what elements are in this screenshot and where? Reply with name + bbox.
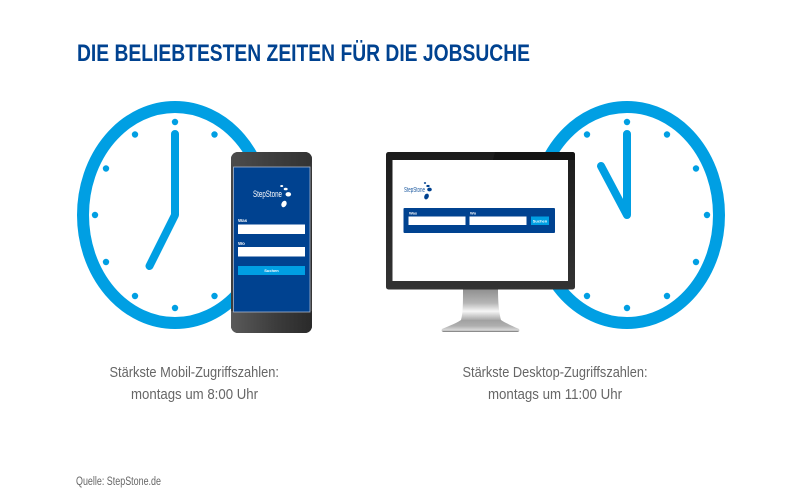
search button	[531, 216, 549, 225]
caption: mobile: montags um 8:00 Uhr	[131, 386, 258, 403]
field: Was: Was	[409, 210, 418, 216]
smartphone	[231, 152, 312, 333]
caption: desktop: Stärkste Desktop-Zugriffszahlen:	[462, 364, 648, 381]
form: Wo: Wo	[238, 241, 245, 246]
field: Wo: Wo	[470, 210, 477, 216]
caption: mobile	[110, 364, 279, 403]
clock hands	[601, 134, 627, 215]
caption: desktop	[462, 364, 648, 403]
phone screen	[234, 167, 310, 312]
monitor screen	[392, 160, 568, 281]
clock: 8 o'clock (mobile)	[83, 107, 267, 323]
hour markers	[92, 119, 218, 311]
clock face ring	[83, 107, 267, 323]
clock hands	[150, 134, 175, 266]
search button	[238, 266, 305, 275]
phone body	[231, 152, 312, 333]
StepStone logo	[253, 185, 291, 208]
caption: mobile: Stärkste Mobil-Zugriffszahlen:	[110, 364, 279, 381]
StepStone logo: StepStone	[253, 189, 282, 199]
desktop monitor: Suchen	[533, 218, 548, 224]
smartphone: Suchen	[264, 268, 279, 273]
title: DIE BELIEBTESTEN ZEITEN FÜR DIE JOBSUCHE	[77, 40, 530, 67]
monitor frame	[386, 152, 575, 290]
caption: desktop: montags um 11:00 Uhr	[488, 386, 622, 403]
desktop monitor	[386, 152, 575, 332]
search panel	[404, 208, 555, 233]
StepStone logo: StepStone	[404, 187, 425, 194]
hour markers	[584, 119, 710, 311]
clock face ring	[535, 107, 719, 323]
form: Was: Was	[238, 218, 248, 223]
clock: 11 o'clock (desktop)	[535, 107, 719, 323]
monitor base	[442, 320, 519, 332]
source note: Quelle: StepStone.de	[76, 476, 161, 488]
StepStone logo	[404, 182, 432, 200]
monitor stand	[461, 289, 501, 320]
